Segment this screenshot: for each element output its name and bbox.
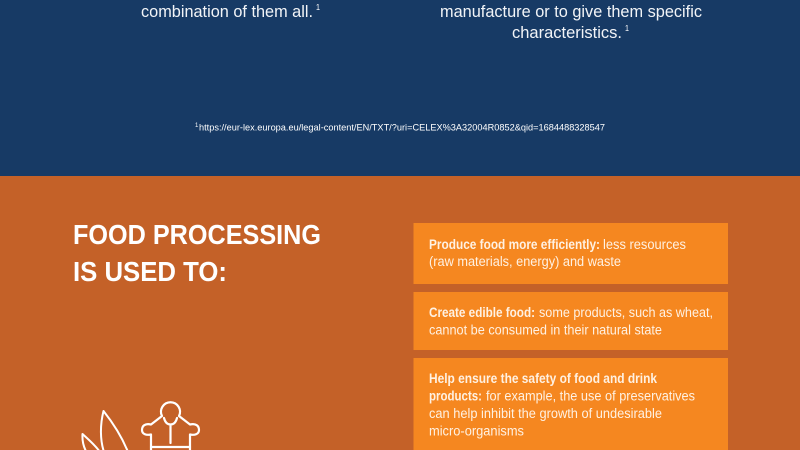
heading: IS USED TO: (73, 256, 227, 287)
card: create edible food (414, 292, 728, 350)
text block: right definition (440, 3, 702, 42)
text block: left definition: 1 (316, 2, 320, 12)
card: help ensure safety: products: (429, 388, 482, 404)
text block: right definition: 1 (625, 23, 629, 33)
text block: left definition: combination of them all. (141, 3, 313, 21)
heading (73, 219, 321, 287)
card: produce food more efficiently: Produce food more efficiently: (429, 237, 600, 252)
heading: FOOD PROCESSING (73, 219, 321, 250)
card: help ensure safety (414, 358, 728, 450)
footnote: 1 (195, 123, 199, 129)
card: produce food more efficiently: (raw materials, energy) and waste (429, 254, 621, 269)
card: create edible food: some products, such as wheat, (539, 305, 713, 320)
card: help ensure safety: for example, the use of preservatives (486, 388, 695, 404)
icon: food cover (142, 402, 199, 450)
footnote: https://eur-lex.europa.eu/legal-content/EN/TXT/?uri=CELEX%3A32004R0852&qid=1684488328547 (199, 122, 605, 134)
card: create edible food: Create edible food: (429, 305, 535, 320)
panel: definitions (navy) (0, 0, 800, 176)
card: create edible food: cannot be consumed in their natural state (429, 322, 662, 338)
text block: right definition: manufacture or to give them specific (440, 3, 702, 21)
card: produce food more efficiently: less resources (603, 237, 686, 252)
text block: right definition: characteristics. (512, 24, 622, 42)
card: help ensure safety: can help inhibit the growth of undesirable (429, 406, 662, 421)
icon: leaves (82, 411, 128, 450)
panel: food processing uses (orange) (0, 176, 800, 450)
card: help ensure safety: Help ensure the safety of food and drink (429, 371, 657, 386)
card: help ensure safety: micro-organisms (429, 424, 524, 438)
card: produce food more efficiently (414, 223, 728, 284)
